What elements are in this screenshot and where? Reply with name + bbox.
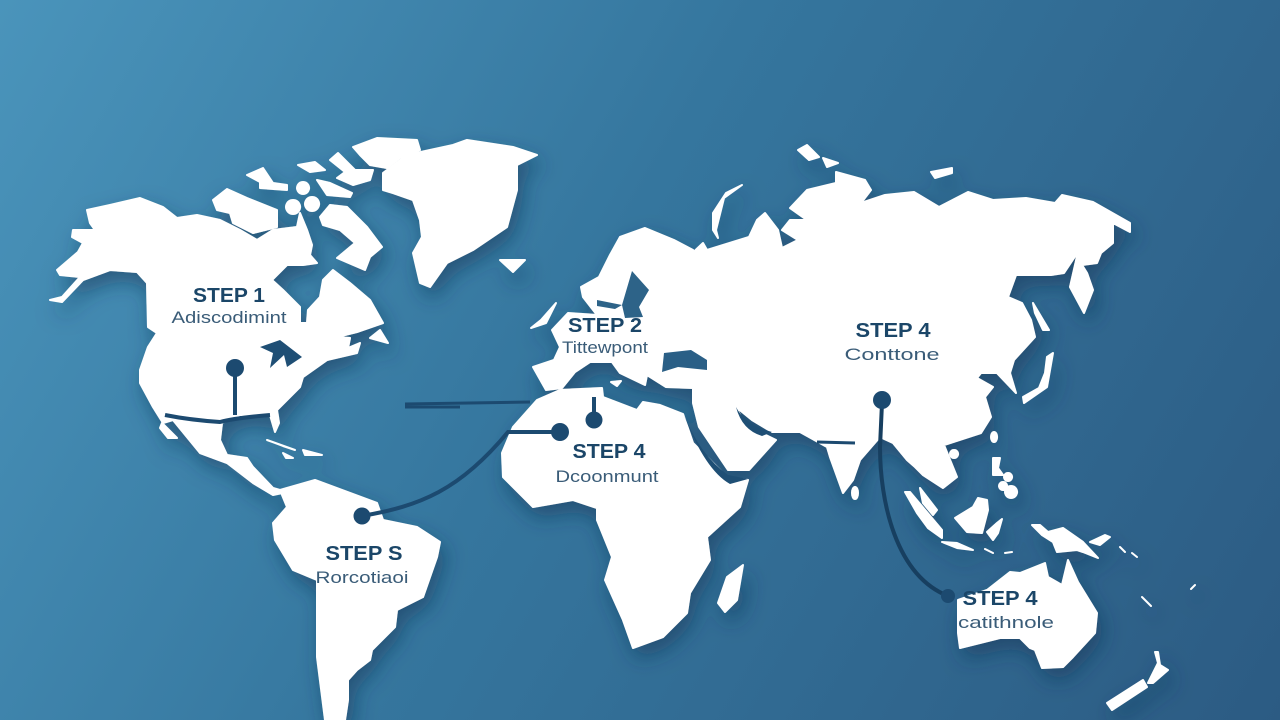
- Red Sea: [684, 415, 748, 484]
- Australia: [958, 560, 1097, 668]
- step 2 label: [562, 315, 648, 357]
- New Guinea: [1032, 525, 1110, 558]
- route: North America: [165, 368, 270, 422]
- step 1 label: STEP 1: [193, 285, 265, 307]
- step 1 label: [172, 285, 287, 327]
- marker: North Africa: [586, 412, 602, 428]
- Persian Gulf: [736, 407, 772, 436]
- step 4 label Africa: Dcoonmunt: [556, 467, 659, 486]
- Madagascar: [718, 565, 743, 612]
- step 4 label Australia: [958, 588, 1054, 632]
- step 4 label Australia: catithnole: [958, 613, 1054, 632]
- Pacific islets: [985, 547, 1195, 606]
- step 2 label: Tittewpont: [562, 338, 648, 357]
- Baja California: [160, 423, 177, 438]
- step 4 label Asia: Conttone: [844, 345, 940, 364]
- Greenland: [383, 140, 537, 287]
- route markers: [226, 359, 955, 603]
- Sulawesi: [987, 519, 1002, 540]
- Philippines: [993, 458, 1017, 498]
- Great Lakes: [260, 340, 302, 368]
- world map landmasses: [50, 138, 1195, 720]
- British Isles: [531, 303, 556, 328]
- Taiwan and Hainan: [950, 432, 997, 458]
- step 2 label: STEP 2: [568, 315, 642, 337]
- Newfoundland: [370, 330, 388, 343]
- step 4 label Asia: STEP 4: [856, 320, 931, 342]
- Arctic arc island: [713, 185, 742, 238]
- route: Asia to Australia: [880, 403, 948, 596]
- Baltic Sea: [597, 271, 649, 318]
- Borneo: [955, 498, 988, 533]
- step S label South America: Rorcotiaoi: [316, 568, 408, 587]
- Black Sea: [662, 350, 707, 372]
- inland waters: [260, 271, 772, 484]
- step 1 label: Adiscodimint: [172, 308, 287, 327]
- Iceland: [500, 260, 525, 272]
- New Zealand: [1107, 652, 1168, 710]
- step 4 label Africa: STEP 4: [572, 441, 646, 463]
- Sri Lanka: [852, 487, 858, 499]
- marker: Australia: [941, 589, 955, 603]
- marker: South America: [354, 508, 370, 524]
- marker: Asia: [873, 391, 891, 409]
- Africa: [502, 388, 748, 648]
- step 4 label Australia: STEP 4: [962, 588, 1038, 610]
- North America: [50, 198, 383, 495]
- route: South America to Africa: [362, 432, 560, 516]
- South America: [273, 480, 440, 720]
- Sumatra and Malay peninsula: [905, 488, 973, 550]
- route lines: [165, 368, 948, 596]
- marker: West Africa: [551, 423, 569, 441]
- marker: North America: [226, 359, 244, 377]
- Russian Arctic islands: [798, 145, 952, 178]
- step 4 label Asia: [844, 320, 940, 364]
- step S label South America: STEP S: [326, 543, 402, 565]
- route: Atlantic: [405, 402, 530, 407]
- small arctic islets: [286, 182, 319, 214]
- Europe and Asia: [533, 172, 1130, 493]
- route: Indian coast: [817, 442, 855, 443]
- Caribbean islands: [267, 440, 322, 458]
- Japan and Sakhalin: [1023, 303, 1053, 403]
- step S label South America: [316, 543, 408, 587]
- step 4 label Africa: [556, 441, 659, 486]
- Sicily: [611, 381, 621, 386]
- route: North Africa: [592, 397, 596, 420]
- Arctic islands: [213, 138, 420, 270]
